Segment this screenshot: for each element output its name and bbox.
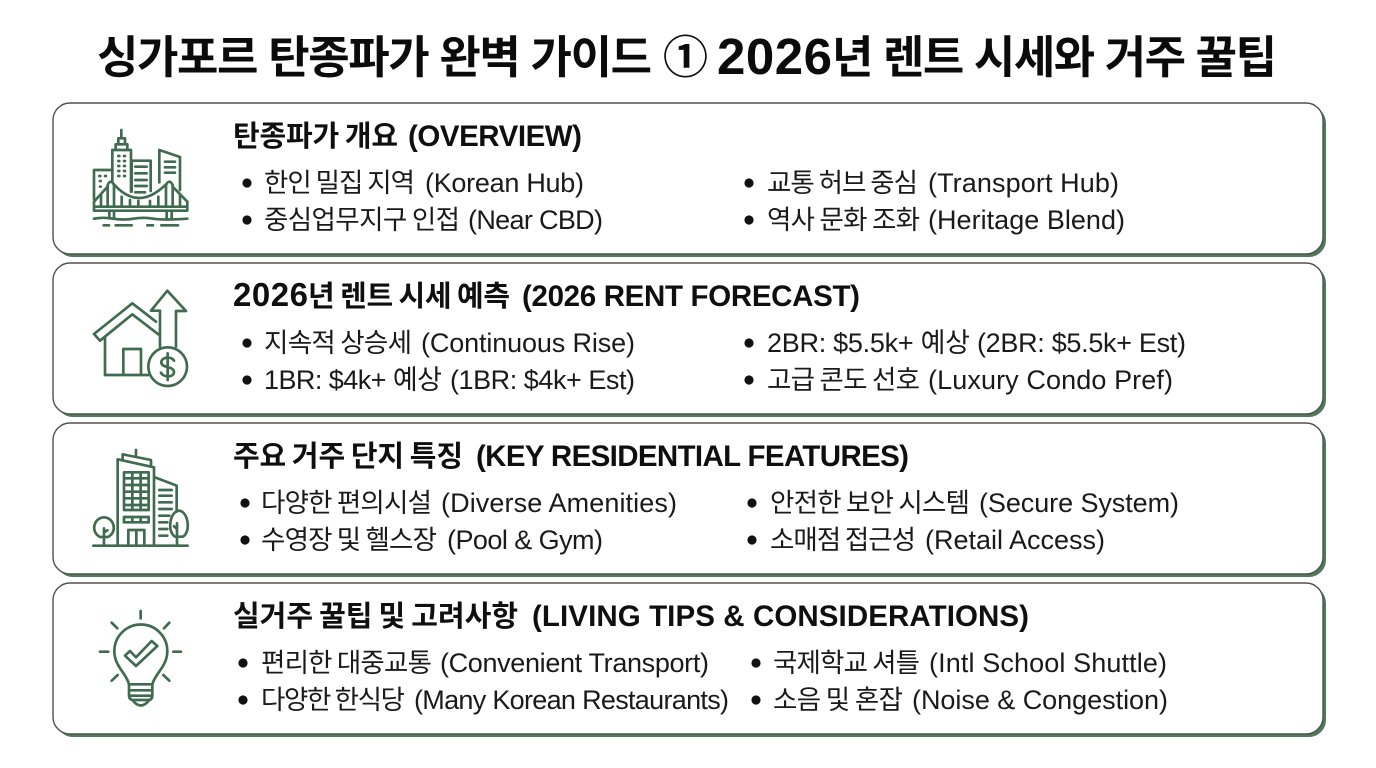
bullet: Near CBD xyxy=(242,205,603,235)
bullet: Pool and Gym: (Pool & Gym) xyxy=(447,525,603,555)
bullet: Korean Hub: (Korean Hub) xyxy=(425,168,584,198)
bullet: 2BR: (2BR: $5.5k+ Est) xyxy=(977,328,1186,358)
heading: rent forecast: (2026 RENT FORECAST) xyxy=(522,280,860,313)
bullet: 2BR: 2BR: $5.5k+ 예상 xyxy=(767,328,970,358)
bullet: Secure System: (Secure System) xyxy=(979,488,1179,518)
heading: rent forecast: 2026 xyxy=(233,276,308,313)
bullet: Pool and Gym xyxy=(240,525,603,555)
bullet: Diverse Amenities xyxy=(240,488,677,518)
bullet: 1BR: 1BR: $4k+ 예상 xyxy=(264,365,442,395)
bullet: Korean Hub: 한인 밀집 지역 xyxy=(264,168,415,198)
bullet: Near CBD: (Near CBD) xyxy=(468,205,603,235)
bullet: Many Korean Restaurants: (Many Korean Restaurants) xyxy=(414,685,729,715)
bullet: Noise and Congestion xyxy=(751,685,1168,715)
bullet: Intl School Shuttle: (Intl School Shuttle) xyxy=(929,648,1167,678)
bullet: Retail Access xyxy=(747,525,1105,555)
bullet: Noise and Congestion: 소음 및 혼잡 xyxy=(773,685,903,715)
heading: overview: 탄종파가 개요 xyxy=(233,120,398,153)
bullet: Diverse Amenities: 다양한 편의시설 xyxy=(261,488,432,518)
bullet: Many Korean Restaurants xyxy=(238,685,729,715)
bullet: Transport Hub: 교통 허브 중심 xyxy=(767,168,918,198)
bullet: Near CBD: 중심업무지구 인접 xyxy=(264,205,460,235)
bullet: Convenient Transport xyxy=(238,648,709,678)
bullet: Continuous Rise: 지속적 상승세 xyxy=(264,328,412,358)
heading: overview: (OVERVIEW) xyxy=(408,120,582,153)
bullet: Luxury Condo Pref xyxy=(744,365,1173,395)
bullet: Noise and Congestion: (Noise & Congestion) xyxy=(912,685,1168,715)
bullet: Heritage Blend: 역사 문화 조화 xyxy=(767,205,920,235)
title: 2026 xyxy=(717,28,832,85)
icon: city skyline and bridge xyxy=(94,130,187,225)
heading: rent forecast xyxy=(233,276,860,313)
panel: rent forecast xyxy=(53,263,1326,417)
panel: key residential features xyxy=(53,423,1326,577)
heading: overview xyxy=(233,120,582,153)
panel: living tips xyxy=(53,583,1326,737)
bullet: Convenient Transport: 편리한 대중교통 xyxy=(261,648,432,678)
icon: house with rising arrow and dollar xyxy=(94,291,187,386)
bullet: 2BR xyxy=(744,328,1186,358)
bullet: Retail Access: (Retail Access) xyxy=(925,525,1105,555)
bullet: 1BR xyxy=(242,365,635,395)
bullet: Luxury Condo Pref: 고급 콘도 선호 xyxy=(767,365,920,395)
bullet: Pool and Gym: 수영장 및 헬스장 xyxy=(261,525,437,555)
heading: living tips: 실거주 꿀팁 및 고려사항 xyxy=(233,600,518,633)
title: 싱가포르 탄종파가 완벽 가이드 xyxy=(97,32,652,83)
bullet: Intl School Shuttle: 국제학교 셔틀 xyxy=(773,648,920,678)
bullet: Transport Hub xyxy=(744,168,1119,198)
bullet: Retail Access: 소매점 접근성 xyxy=(770,525,916,555)
heading: key residential features: 주요 거주 단지 특징 xyxy=(233,440,463,473)
bullet: Convenient Transport: (Convenient Transport) xyxy=(440,648,709,678)
bullet: Many Korean Restaurants: 다양한 한식당 xyxy=(261,685,405,715)
icon: light bulb with check mark xyxy=(100,611,181,705)
heading: living tips: (LIVING TIPS & CONSIDERATIONS) xyxy=(532,600,1029,633)
bullet: Secure System xyxy=(747,488,1179,518)
heading: key residential features: (KEY RESIDENTIAL FEATURES) xyxy=(476,440,909,473)
title: 년 렌트 시세와 거주 꿀팁 xyxy=(832,32,1277,83)
heading: key residential features xyxy=(233,440,909,473)
heading: living tips xyxy=(233,600,1029,633)
bullet: Heritage Blend: (Heritage Blend) xyxy=(928,205,1125,235)
heading: rent forecast: 년 렌트 시세 예측 xyxy=(308,280,510,313)
bullet: Diverse Amenities: (Diverse Amenities) xyxy=(441,488,677,518)
bullet: Heritage Blend xyxy=(744,205,1125,235)
bullet: 1BR: (1BR: $4k+ Est) xyxy=(450,365,635,395)
title: ① xyxy=(663,32,708,83)
bullet: Continuous Rise xyxy=(242,328,635,358)
bullet: Luxury Condo Pref: (Luxury Condo Pref) xyxy=(928,365,1173,395)
bullet: Korean Hub xyxy=(242,168,584,198)
bullet: Secure System: 안전한 보안 시스템 xyxy=(770,488,970,518)
title xyxy=(97,28,1277,85)
bullet: Intl School Shuttle xyxy=(751,648,1167,678)
icon: apartment tower with trees xyxy=(93,450,188,546)
panel: overview xyxy=(53,103,1326,257)
bullet: Transport Hub: (Transport Hub) xyxy=(928,168,1119,198)
bullet: Continuous Rise: (Continuous Rise) xyxy=(421,328,635,358)
